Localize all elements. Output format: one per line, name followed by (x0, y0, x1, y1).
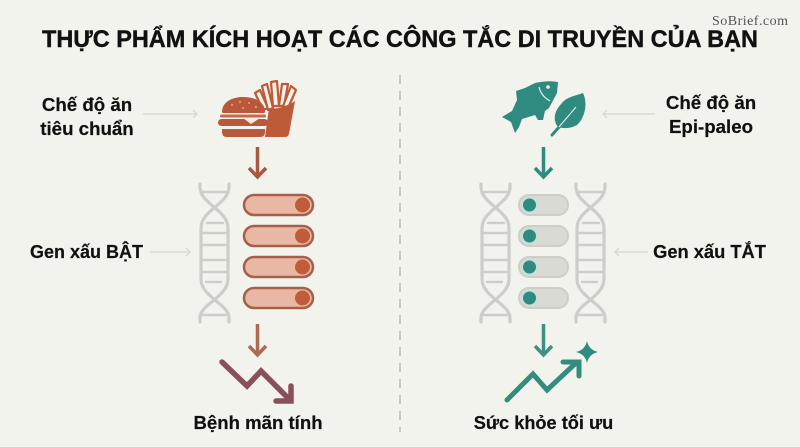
panel: epi-paleo diet (474, 81, 766, 433)
label: standard diet: Chế độ ăn (42, 94, 132, 115)
icon: dna (200, 184, 229, 322)
label: chronic disease: Bệnh mãn tính (193, 412, 323, 433)
icon: dna right (576, 184, 605, 322)
title: THỰC PHẨM KÍCH HOẠT CÁC CÔNG TẮC DI TRUYỀN CỦA BẠN (42, 24, 758, 53)
arrow: food to switches (535, 147, 552, 177)
arrow: standard diet to burger (143, 110, 197, 118)
arrow: switches to outcome (249, 324, 266, 355)
icon: rising chart (507, 362, 579, 400)
icon: leaf (552, 93, 585, 135)
watermark: SoBrief.com (712, 14, 788, 29)
icon: falling chart (222, 362, 291, 401)
label: standard diet: tiêu chuẩn (40, 118, 134, 139)
panel: standard diet (30, 81, 323, 433)
label: bad genes on: Gen xấu BẬT (30, 241, 143, 262)
arrow: burger to switches (249, 147, 266, 177)
arrow: switches to outcome (535, 324, 552, 355)
icon: dna left (481, 184, 510, 322)
arrow: label to dna right (615, 248, 648, 256)
switches off (519, 195, 568, 308)
label: epi-paleo diet: Epi-paleo (669, 116, 753, 137)
switches on (244, 195, 313, 308)
icon: burger (218, 97, 268, 137)
arrow: label to dna (150, 248, 190, 256)
icon: fries (255, 81, 296, 137)
label: bad genes off: Gen xấu TẮT (653, 241, 766, 262)
icon: fish (502, 81, 558, 133)
label: epi-paleo diet: Chế độ ăn (666, 92, 756, 113)
arrow: leaf from label (603, 110, 655, 118)
label: optimal health: Sức khỏe tối ưu (474, 413, 613, 433)
icon: sparkle (576, 341, 598, 363)
